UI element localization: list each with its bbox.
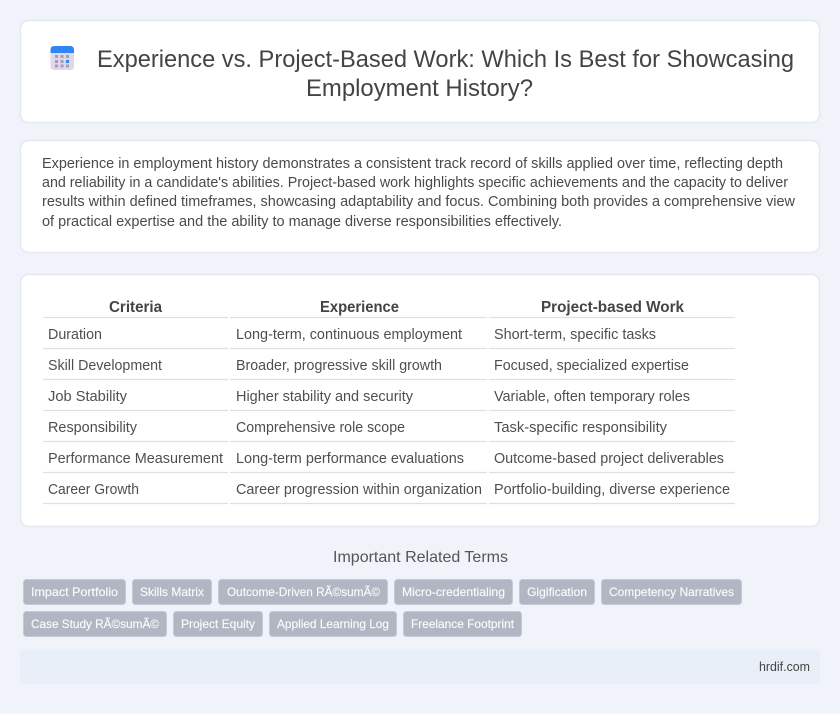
- table header: [109, 299, 684, 316]
- tag: Case Study Resume: Case Study RÃ©sumÃ©: [31, 617, 159, 631]
- table row: Responsibility: [48, 420, 668, 436]
- tag: Outcome-Driven Resume: [218, 580, 388, 604]
- text block: summary: results within defined timeframes, showcasing adaptability and focus. Combining both provides a comprehensive view: [42, 194, 796, 210]
- table row: Performance Measurement: Outcome-based project deliverables: [494, 451, 724, 467]
- table header: Experience: [320, 299, 399, 316]
- tag: Freelance Footprint: [404, 612, 522, 636]
- footer: hrdif.com: [759, 660, 810, 674]
- tag: Applied Learning Log: [270, 612, 396, 636]
- tag: Impact Portfolio: [24, 580, 126, 604]
- panel: summary paragraph: [20, 140, 820, 252]
- table row: Career Growth: Career Growth: [48, 482, 139, 498]
- table row: Responsibility: Comprehensive role scope: [236, 420, 405, 436]
- table header: Criteria: [109, 299, 162, 316]
- panel: title card: [20, 20, 820, 122]
- table header: Project-based Work: [541, 299, 684, 316]
- tag list: related terms: [24, 580, 742, 636]
- text block: summary: [42, 156, 796, 230]
- text block: summary: Experience in employment history demonstrates a consistent track record of skills applied over time, reflecting depth: [42, 156, 783, 172]
- tag: Gigification: [520, 580, 594, 604]
- table row: Duration: Duration: [48, 327, 102, 343]
- title: Employment History?: [306, 75, 533, 102]
- table row: Job Stability: Variable, often temporary roles: [494, 389, 690, 405]
- table row: Job Stability: Job Stability: [48, 389, 128, 405]
- table row: Career Growth: [48, 482, 730, 498]
- table row: Career Growth: Career progression within organization: [236, 482, 482, 498]
- text block: summary: of practical expertise and the ability to manage diverse responsibilities effectively.: [42, 214, 562, 230]
- tag: Case Study Resume: [24, 612, 166, 636]
- tag: Applied Learning Log: Applied Learning Log: [277, 617, 389, 631]
- table row: Performance Measurement: [48, 451, 724, 467]
- tag: Impact Portfolio: Impact Portfolio: [31, 585, 118, 599]
- heading: related terms: Important Related Terms: [333, 549, 508, 566]
- table row: Job Stability: Higher stability and security: [236, 389, 414, 405]
- icon: calendar: [50, 46, 74, 70]
- title: [97, 46, 794, 102]
- table row: Skill Development: Skill Development: [48, 358, 162, 374]
- tag: Project Equity: [174, 612, 262, 636]
- table row: Performance Measurement: Long-term performance evaluations: [236, 451, 464, 467]
- footer: [20, 650, 820, 684]
- table row: Job Stability: [48, 389, 690, 405]
- table row: Duration: Short-term, specific tasks: [494, 327, 656, 343]
- table row: Duration: [48, 327, 656, 343]
- table row: Performance Measurement: Performance Measurement: [48, 451, 223, 467]
- tag: Competency Narratives: [602, 580, 742, 604]
- table row: Duration: Long-term, continuous employment: [236, 327, 462, 343]
- panel: comparison table: [20, 274, 820, 526]
- title: Experience vs. Project-Based Work: Which Is Best for Showcasing: [97, 46, 794, 73]
- text block: summary: and reliability in a candidate's abilities. Project-based work highlights specific achievements and the capacity to deliver: [42, 175, 788, 191]
- tag: Outcome-Driven Resume: Outcome-Driven RÃ©sumÃ©: [227, 585, 380, 599]
- table row: Responsibility: Task-specific responsibility: [494, 420, 668, 436]
- tag: Gigification: Gigification: [527, 585, 587, 599]
- table row: Skill Development: [48, 358, 689, 374]
- table row: Responsibility: Responsibility: [48, 420, 138, 436]
- tag: Skills Matrix: [132, 580, 212, 604]
- tag: Competency Narratives: Competency Narratives: [609, 585, 734, 599]
- tag: Skills Matrix: Skills Matrix: [140, 585, 204, 599]
- tag: Freelance Footprint: Freelance Footprint: [411, 617, 515, 631]
- tag: Micro-credentialing: [394, 580, 512, 604]
- table row: Skill Development: Focused, specialized expertise: [494, 358, 689, 374]
- tag: Project Equity: Project Equity: [181, 617, 255, 631]
- table row: Career Growth: Portfolio-building, diverse experience: [494, 482, 730, 498]
- table row: Skill Development: Broader, progressive skill growth: [236, 358, 442, 374]
- tag: Micro-credentialing: Micro-credentialing: [402, 585, 505, 599]
